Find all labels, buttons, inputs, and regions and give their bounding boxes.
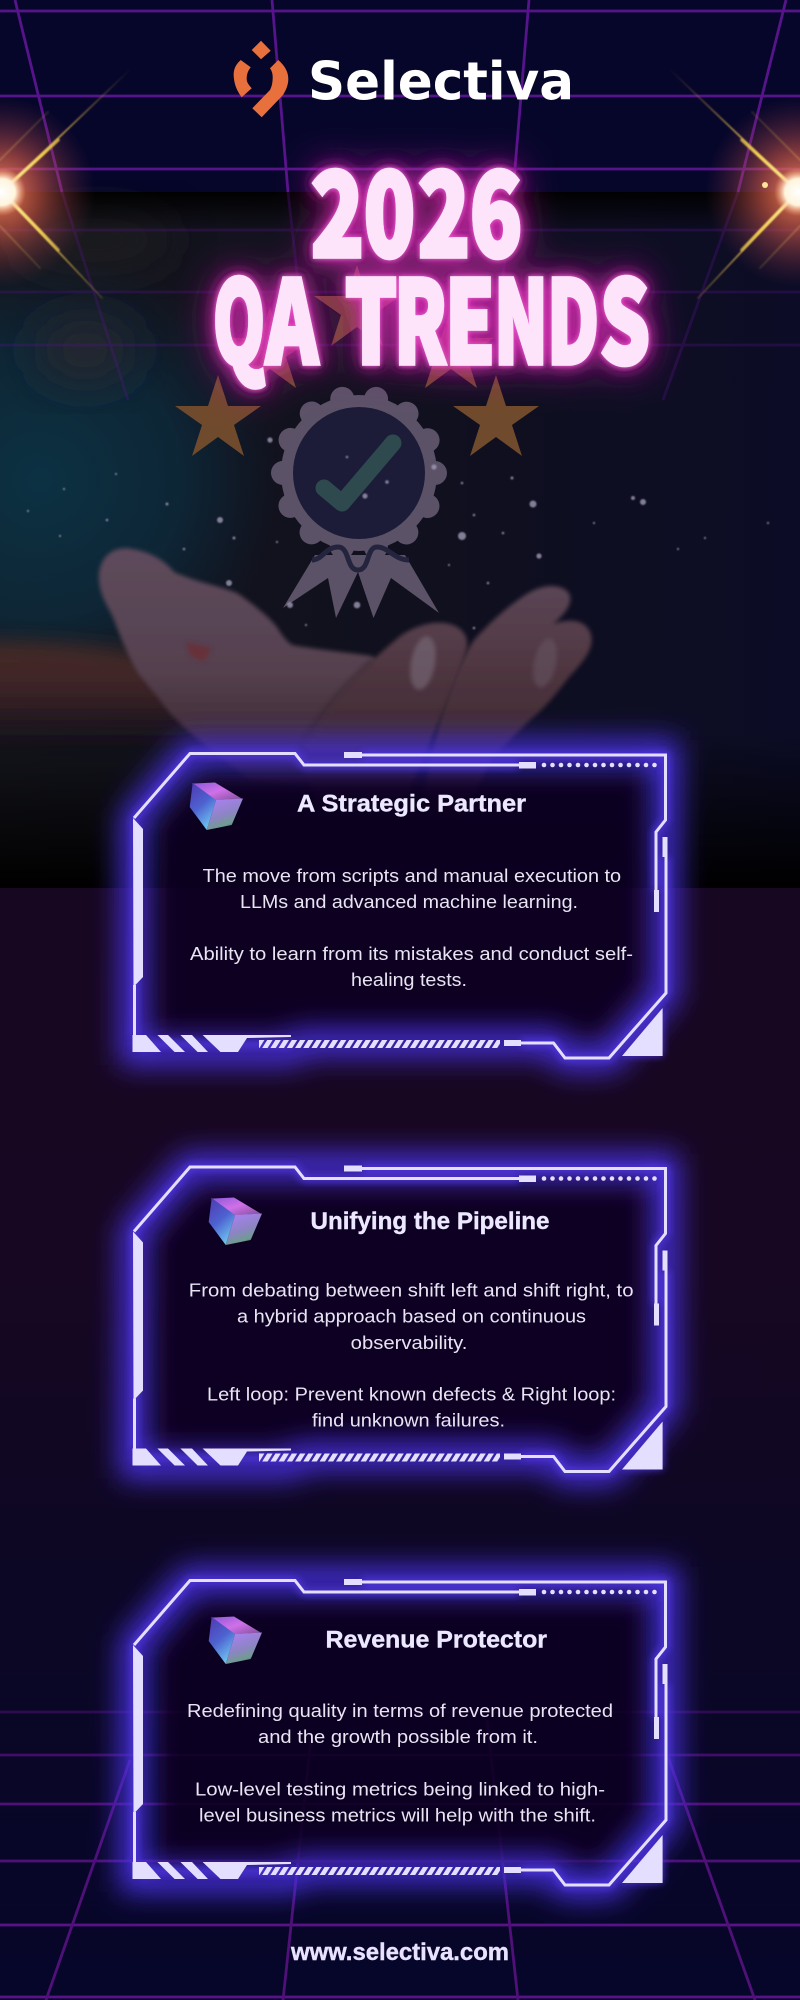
body text: find unknown failures.	[312, 1410, 505, 1430]
hero photo: hand holding quality badge	[0, 192, 800, 888]
sparkle particles	[27, 437, 769, 629]
footer url: www.selectiva.com	[290, 1939, 509, 1966]
icon: Selectiva mark	[234, 41, 288, 117]
logo	[234, 41, 574, 117]
arm and hand	[0, 548, 592, 820]
body text: healing tests.	[351, 969, 467, 990]
title: N	[494, 232, 548, 396]
title: 6	[470, 124, 522, 290]
title: T	[345, 232, 397, 396]
title: 2	[418, 124, 470, 290]
title: E	[445, 232, 495, 396]
body text: The move from scripts and manual execution to	[203, 865, 621, 886]
lens flare: left	[0, 62, 138, 298]
heading: Revenue Protector	[326, 1626, 547, 1654]
title: 0	[364, 124, 415, 290]
stars	[175, 265, 539, 456]
card frame	[132, 1579, 668, 1885]
title: A	[265, 232, 319, 396]
lower background gradient	[0, 888, 800, 2000]
wordmark: Selectiva	[308, 52, 574, 112]
body text: Ability to learn from its mistakes and conduct self-	[190, 943, 633, 964]
icon: quality badge	[281, 395, 439, 618]
panel: Revenue Protector	[132, 1579, 668, 1885]
lens flare: right	[662, 62, 800, 298]
body text	[189, 1280, 634, 1430]
heading: Unifying the Pipeline	[310, 1208, 550, 1235]
title: D	[547, 232, 599, 396]
card frame	[132, 752, 668, 1058]
body text	[187, 1700, 613, 1826]
panel: Unifying the Pipeline	[132, 1166, 668, 1472]
icon: cube	[209, 1198, 262, 1245]
card frame	[132, 1166, 668, 1472]
body text	[190, 865, 633, 990]
heading: A Strategic Partner	[297, 790, 526, 818]
icon: cube	[190, 782, 243, 830]
title	[213, 124, 650, 396]
title: S	[600, 232, 650, 396]
body text: observability.	[351, 1332, 467, 1353]
body text: From debating between shift left and shift right, to	[189, 1280, 634, 1300]
body text: level business metrics will help with the shift.	[199, 1804, 596, 1826]
title: 2	[311, 124, 364, 290]
title: R	[394, 232, 447, 396]
body text: Redefining quality in terms of revenue protected	[187, 1700, 613, 1721]
body text: Low-level testing metrics being linked to high-	[195, 1778, 605, 1800]
body text: and the growth possible from it.	[258, 1726, 538, 1747]
title: Q	[213, 232, 265, 396]
panel: A Strategic Partner	[132, 752, 668, 1058]
icon: cube	[209, 1616, 262, 1664]
body text: Left loop: Prevent known defects & Right loop:	[207, 1384, 616, 1404]
body text: LLMs and advanced machine learning.	[240, 891, 578, 912]
body text: a hybrid approach based on continuous	[237, 1306, 586, 1326]
